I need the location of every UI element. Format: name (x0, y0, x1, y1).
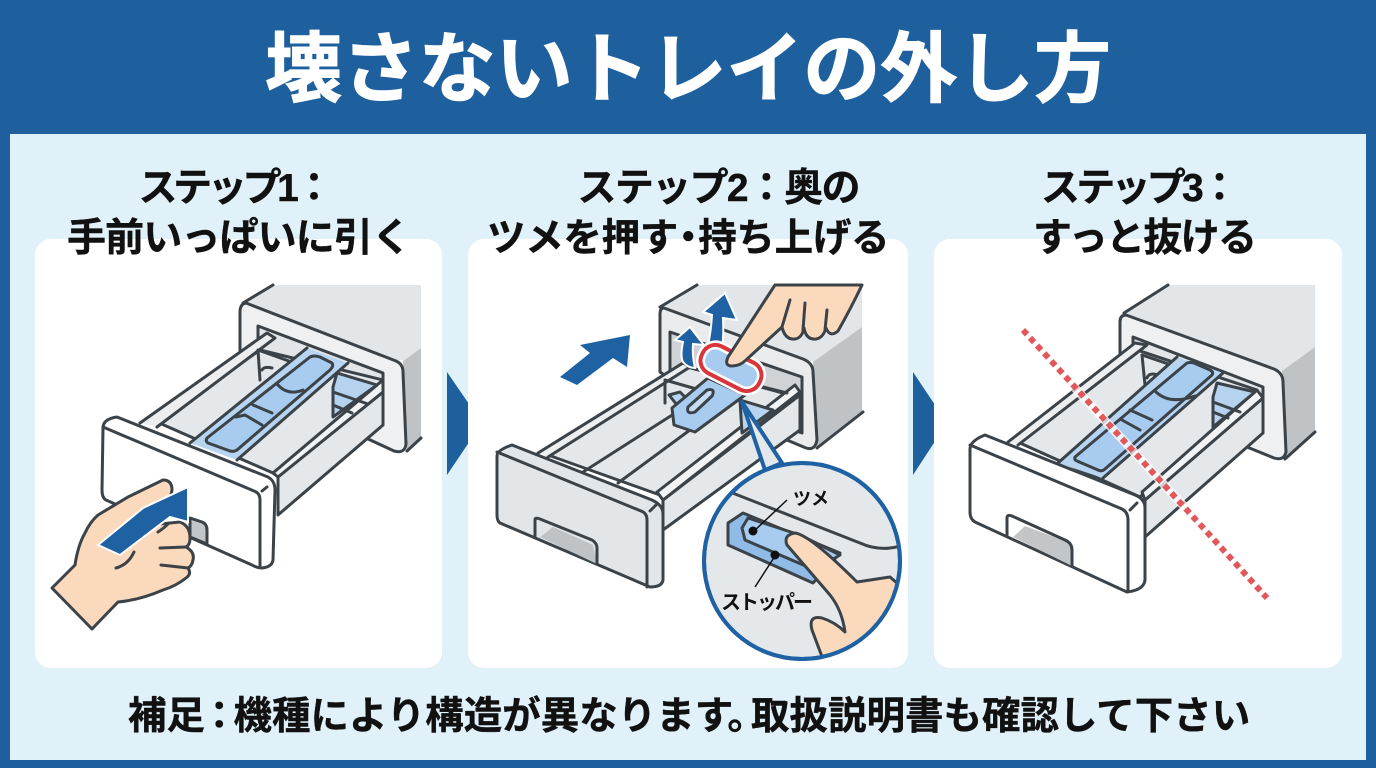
heading: step 1 (67, 167, 411, 260)
icon: finger separators (782, 300, 827, 330)
panel: step 2 (468, 239, 908, 670)
arrow: lift large (703, 293, 737, 347)
illustration: housing step 3 (1120, 285, 1315, 459)
panel: step 3 (934, 239, 1342, 668)
arrow: pull direction (98, 487, 188, 555)
heading: step 2: ツメを押す・持ち上げる (487, 217, 889, 260)
heading: step 3 (1033, 167, 1257, 260)
illustration: housing step 1 (240, 285, 421, 452)
illustration: housing step 2 (658, 285, 863, 449)
callout: zoom detail (704, 402, 905, 670)
callout label: tsume: ツメ (793, 489, 829, 509)
illustration: drawer step 2 (497, 363, 800, 587)
heading: step 1: 手前いっぱいに引く (67, 217, 411, 260)
icon: pointing finger (727, 285, 862, 366)
dotted line: extraction path (1023, 330, 1267, 598)
highlight: claw outline (696, 340, 766, 396)
arrow: step 1 to step 2 (447, 372, 482, 475)
illustration: drawer step 3 (970, 343, 1263, 592)
header band (0, 0, 1376, 134)
footnote: 補足：機種により構造が異なります。取扱説明書も確認して下さい (128, 695, 1250, 738)
leader: tsume (748, 500, 787, 536)
heading: step 2 (487, 167, 889, 260)
heading: step 3: すっと抜ける (1033, 217, 1257, 260)
title: 壊さないトレイの外し方 (265, 27, 1111, 113)
leader: stopper (755, 550, 780, 587)
arrow: push direction (560, 335, 630, 385)
heading: step 2: ステップ2：奥の (578, 167, 860, 210)
arrow: step 2 to step 3 (913, 372, 947, 475)
arrow: lift small (675, 327, 704, 368)
icon: finger joints (116, 524, 188, 568)
panel: step 1 (35, 239, 442, 668)
callout label: stopper: ストッパー (721, 591, 813, 614)
illustration: drawer step 1 (102, 333, 383, 568)
icon: hand pulling (52, 480, 193, 629)
heading: step 3: ステップ3： (1041, 167, 1239, 210)
heading: step 1: ステップ1： (138, 167, 334, 210)
